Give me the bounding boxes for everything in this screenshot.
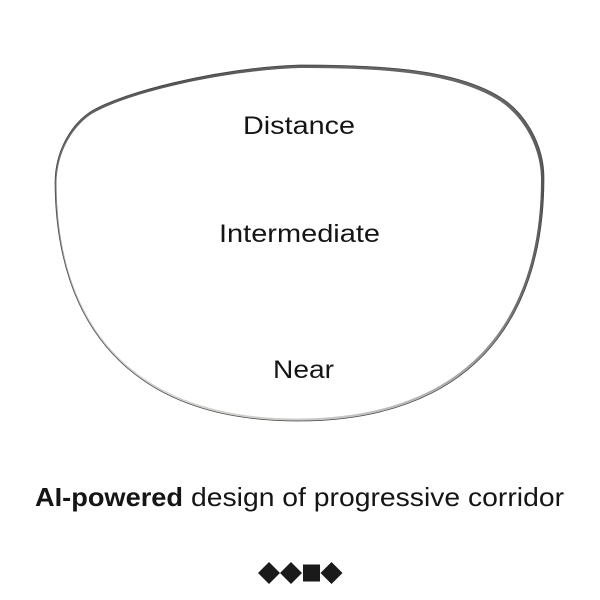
label: Intermediate: Intermediate xyxy=(219,220,380,248)
caption: design of progressive corridor xyxy=(191,482,564,512)
logo: diamonds and square xyxy=(258,562,342,584)
label: Distance: Distance xyxy=(243,112,355,140)
label: Near: Near xyxy=(273,356,334,384)
caption: AI-powered xyxy=(35,482,183,512)
lens outline xyxy=(55,65,544,421)
caption xyxy=(35,482,564,512)
